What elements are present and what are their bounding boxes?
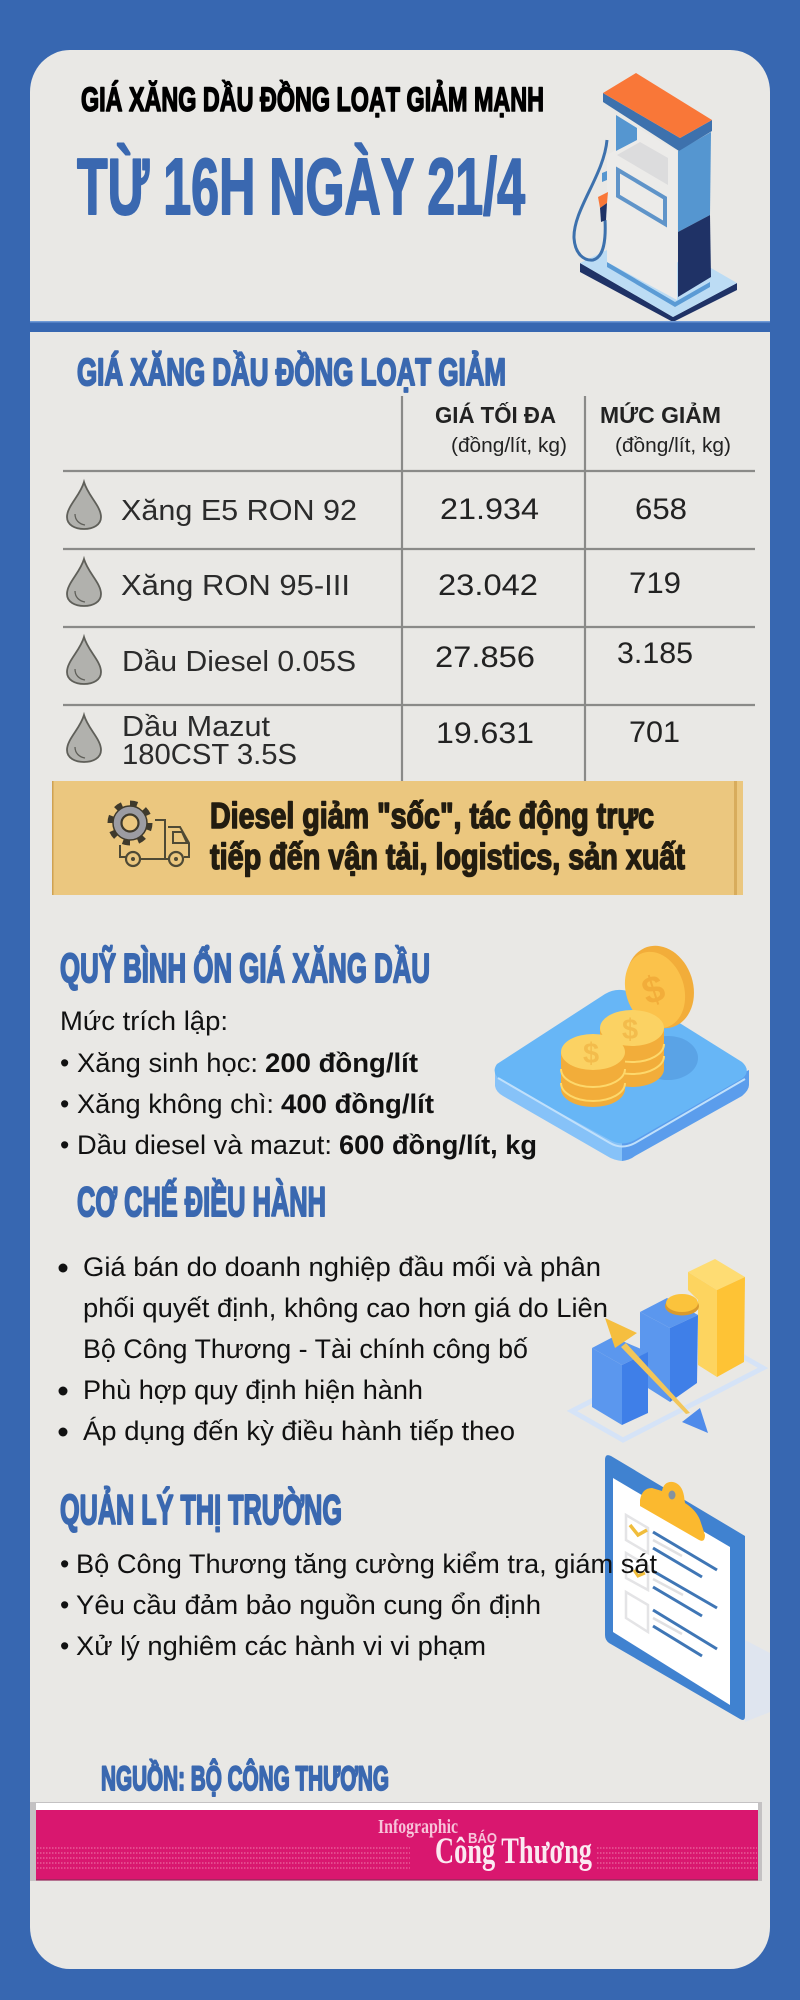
text block: market list: Xử lý nghiêm các hành vi vi phạm: [76, 1631, 486, 1661]
text block: market list: Bộ Công Thương tăng cường kiểm tra, giám sát: [76, 1549, 658, 1579]
title line 1: GIÁ XĂNG DẦU ĐỒNG LOẠT GIẢM MẠNH: [81, 81, 544, 119]
callout text: Diesel giảm "sốc", tác động trực: [210, 795, 654, 836]
text block: fund rates: Mức trích lập:: [60, 1006, 228, 1036]
row: Mazut: 19.631: [436, 717, 534, 750]
row: Diesel: 3.185: [617, 637, 693, 670]
table header: max price: [435, 401, 567, 457]
text block: fund rates: 200 đồng/lít: [265, 1048, 418, 1078]
row: RON 95-III: Xăng RON 95-III: [121, 570, 350, 602]
divider band: [30, 321, 770, 332]
icon: bar chart with arrow: [572, 1259, 763, 1440]
text block: fund rates: Xăng sinh học:: [77, 1048, 258, 1078]
text block: fund rates: 600 đồng/lít, kg: [339, 1130, 537, 1160]
table header: max price: GIÁ TỐI ĐA: [435, 401, 556, 428]
logo text: Công Thương: [435, 1831, 592, 1872]
table header: reduction: (đồng/lít, kg): [615, 435, 731, 457]
row: Mazut: 701: [629, 716, 680, 749]
icon: coins on platform: $: [637, 967, 670, 1014]
row: Mazut: Dầu Mazut: [122, 711, 270, 743]
row: RON 95-III: 719: [629, 567, 681, 600]
callout text: [210, 795, 685, 877]
row: E5 RON 92: Xăng E5 RON 92: [121, 495, 357, 527]
text block: fund rates: Xăng không chì:: [77, 1089, 274, 1119]
table header: max price: (đồng/lít, kg): [451, 435, 567, 457]
text block: market list: Yêu cầu đảm bảo nguồn cung ổn định: [76, 1590, 541, 1620]
row: Diesel: 27.856: [435, 641, 535, 674]
text block: fund rates: 400 đồng/lít: [281, 1089, 434, 1119]
text block: mechanism list: Bộ Công Thương - Tài chính công bố: [83, 1334, 528, 1364]
text block: fund rates: Dầu diesel và mazut:: [77, 1130, 332, 1160]
footer banner: [30, 1802, 762, 1881]
logo text: [378, 1816, 592, 1872]
text block: fund rates: •: [60, 1130, 69, 1160]
text block: mechanism list: Giá bán do doanh nghiệp đầu mối và phân: [83, 1252, 601, 1282]
icon: coins on platform: $: [583, 1038, 599, 1070]
icon: clipboard: [605, 1455, 770, 1722]
callout: diesel banner: [52, 781, 743, 895]
text block: mechanism list: [58, 1252, 608, 1446]
text block: market list: •: [60, 1631, 69, 1661]
row: Diesel: Dầu Diesel 0.05S: [122, 646, 356, 678]
icon: gear and truck: [111, 804, 189, 866]
icon: coins on platform: [495, 937, 749, 1161]
source label: NGUỒN: BỘ CÔNG THƯƠNG: [101, 1759, 389, 1798]
text block: market list: •: [60, 1549, 69, 1579]
text block: mechanism list: Áp dụng đến kỳ điều hành tiếp theo: [83, 1416, 515, 1446]
text block: mechanism list: Phù hợp quy định hiện hành: [83, 1375, 423, 1405]
text block: mechanism list: phối quyết định, không cao hơn giá do Liên: [83, 1293, 608, 1323]
logo text: Infographic: [378, 1816, 458, 1838]
row: E5 RON 92: [67, 482, 687, 529]
heading: stabilization fund: QUỸ BÌNH ỔN GIÁ XĂNG DẦU: [60, 944, 430, 991]
text block: market list: •: [60, 1590, 69, 1620]
text block: fund rates: •: [60, 1089, 69, 1119]
row: Diesel: [67, 637, 693, 684]
title line 2: TỪ 16H NGÀY 21/4: [77, 142, 525, 231]
price table: [63, 396, 755, 781]
table header: reduction: [600, 400, 731, 457]
icon: coins on platform: $: [622, 1014, 638, 1046]
callout text: tiếp đến vận tải, logistics, sản xuất: [210, 836, 685, 877]
logo text: BÁO: [468, 1830, 497, 1847]
table header: reduction: MỨC GIẢM: [600, 400, 721, 428]
row: E5 RON 92: 658: [635, 493, 687, 526]
icon: fuel pump: [574, 73, 737, 322]
row: E5 RON 92: 21.934: [440, 493, 539, 526]
heading: mechanism: CƠ CHẾ ĐIỀU HÀNH: [77, 1178, 326, 1225]
row: RON 95-III: [67, 559, 681, 606]
heading: market management: QUẢN LÝ THỊ TRƯỜNG: [60, 1485, 342, 1533]
row: Mazut: 180CST 3.5S: [122, 739, 297, 771]
row: RON 95-III: 23.042: [438, 569, 538, 602]
text block: fund rates: •: [60, 1048, 69, 1078]
text block: market list: [60, 1549, 658, 1661]
row: Mazut: [67, 711, 680, 771]
heading: price table: GIÁ XĂNG DẦU ĐỒNG LOẠT GIẢM: [77, 350, 506, 394]
text block: fund rates: [60, 1006, 537, 1160]
